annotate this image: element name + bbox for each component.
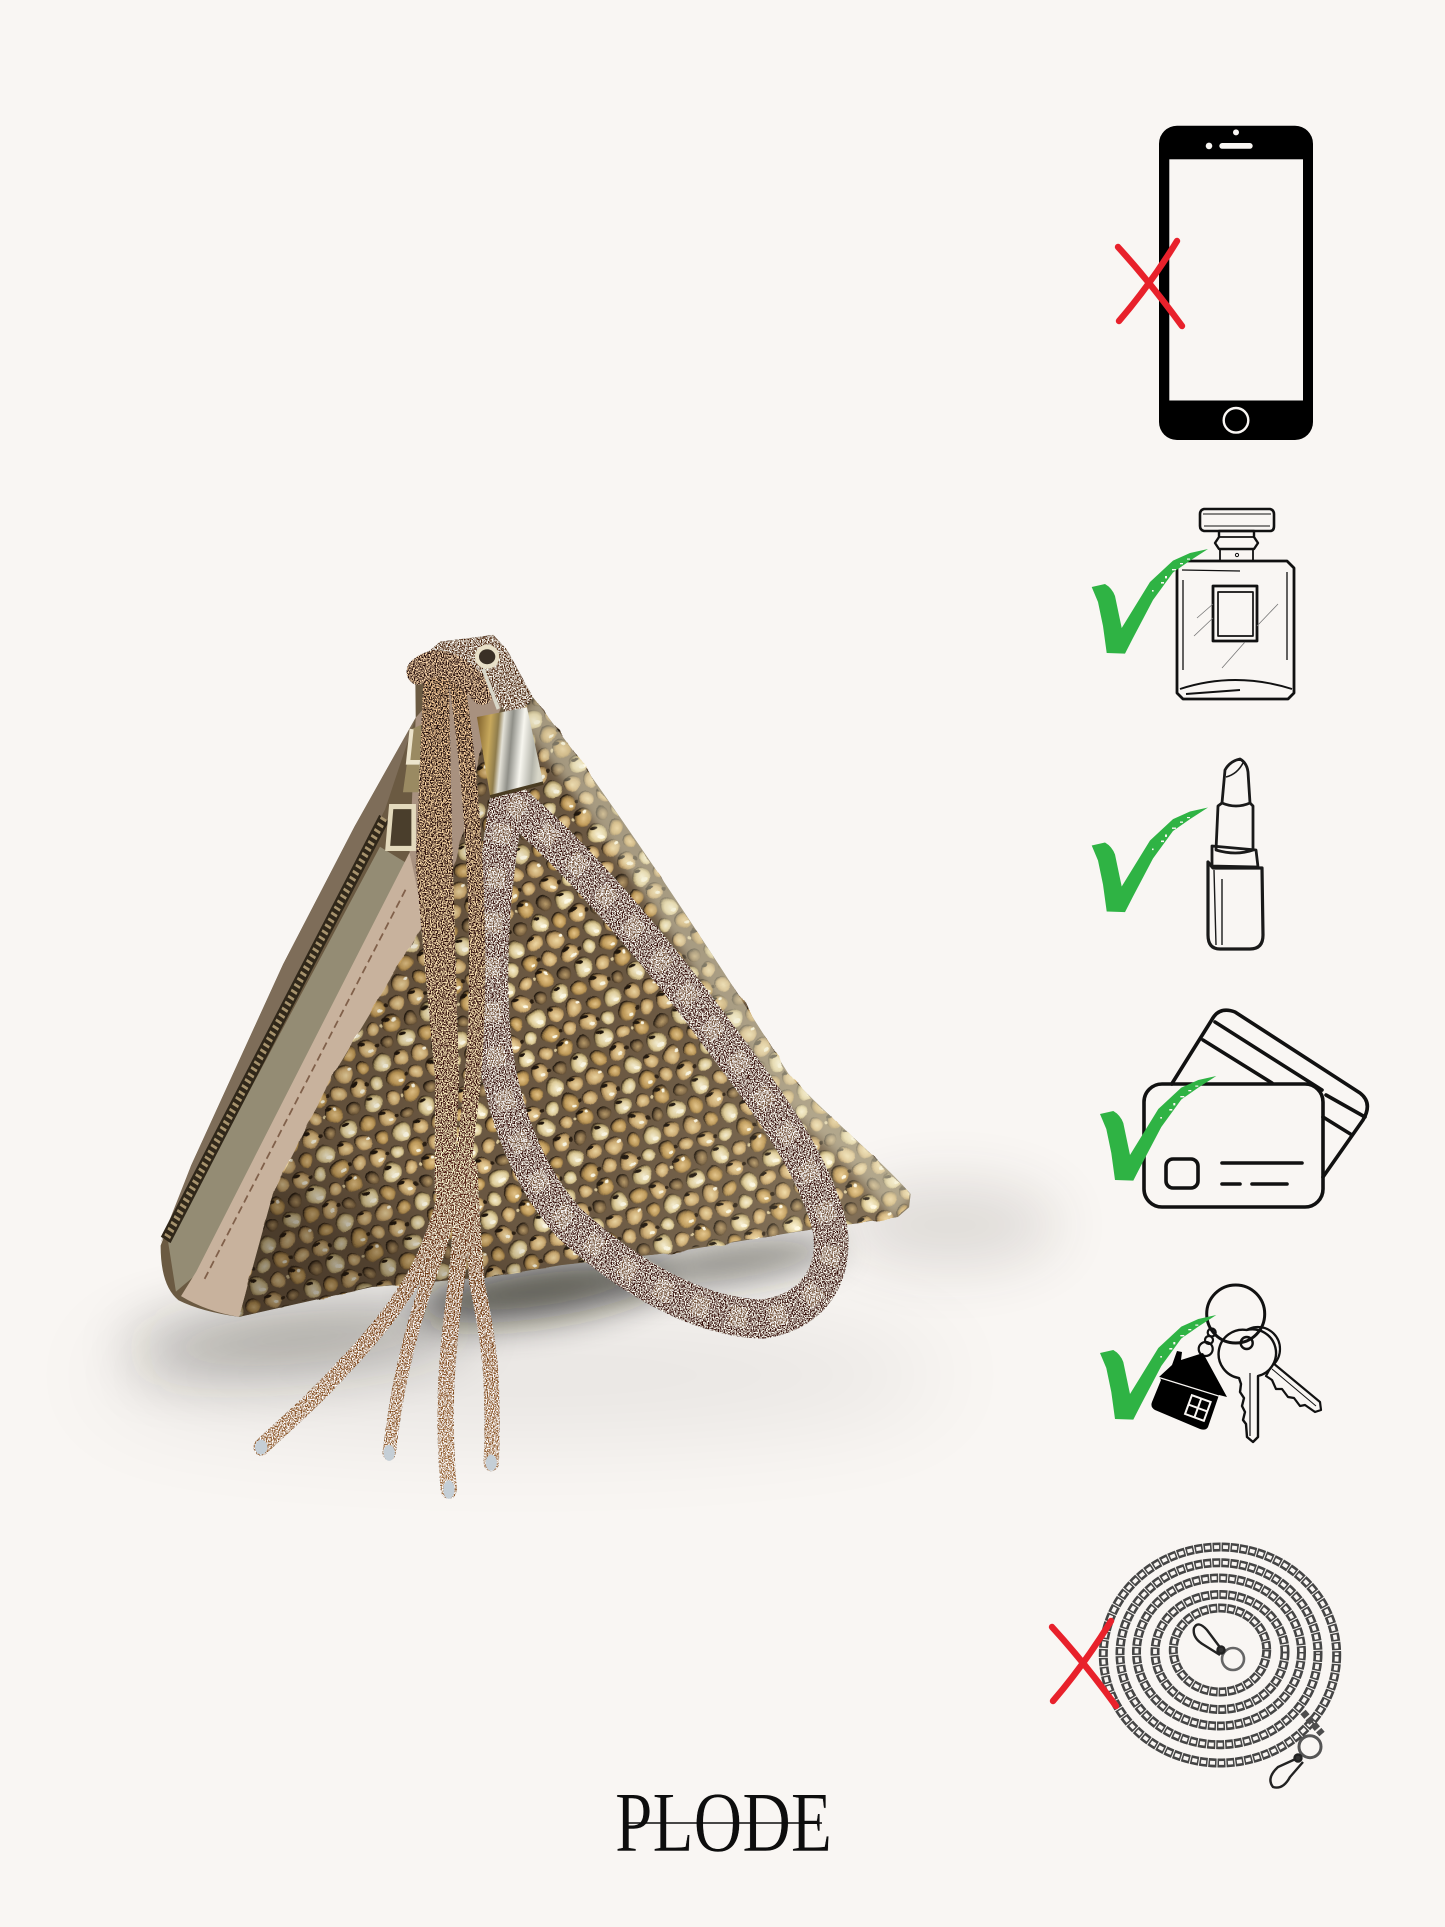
braided wrist strap [491, 801, 831, 1319]
top suede tab [415, 635, 533, 720]
zipper tape [168, 847, 408, 1292]
tassel crystal tips [255, 1440, 497, 1499]
fob links [1199, 1328, 1216, 1356]
icon: bank cards [1144, 1010, 1367, 1207]
key ring [1207, 1285, 1265, 1343]
back key [1236, 1327, 1321, 1412]
icon: smartphone [1159, 126, 1313, 440]
back leather strip [161, 718, 416, 1243]
rhinestone panel [207, 677, 921, 1320]
red cross: phone [1118, 241, 1182, 326]
suede binding [181, 852, 426, 1317]
chain link openings [1103, 1547, 1337, 1763]
green check: keys [1100, 1315, 1216, 1420]
icon: perfume bottle [1177, 509, 1294, 699]
zipper hardware [388, 720, 431, 848]
product photo: rhinestone pyramid pouch [161, 635, 921, 1499]
pouch silhouette [161, 635, 911, 1317]
icon: house keys [1151, 1285, 1321, 1442]
metal cap and pull [477, 647, 543, 797]
bag drop shadow [90, 1183, 1060, 1435]
upper suede panel [410, 672, 508, 930]
icon: coiled chain strap [1103, 1547, 1337, 1788]
tassel strands [261, 664, 492, 1490]
house fob [1151, 1351, 1227, 1430]
clasp inner [1194, 1624, 1244, 1670]
chain coils [1103, 1547, 1337, 1763]
zipper teeth [166, 818, 384, 1240]
green check: perfume [1092, 549, 1208, 654]
green check: lipstick [1092, 808, 1208, 912]
red cross: chain [1052, 1621, 1116, 1706]
front key [1219, 1329, 1276, 1442]
suede stitching [204, 890, 406, 1280]
house window [1185, 1395, 1211, 1421]
clasp outer [1270, 1736, 1321, 1788]
brand logo: PLODE [615, 1774, 832, 1870]
chain tail [1303, 1712, 1322, 1734]
green check: cards [1100, 1076, 1216, 1181]
icon: lipstick [1208, 759, 1263, 949]
